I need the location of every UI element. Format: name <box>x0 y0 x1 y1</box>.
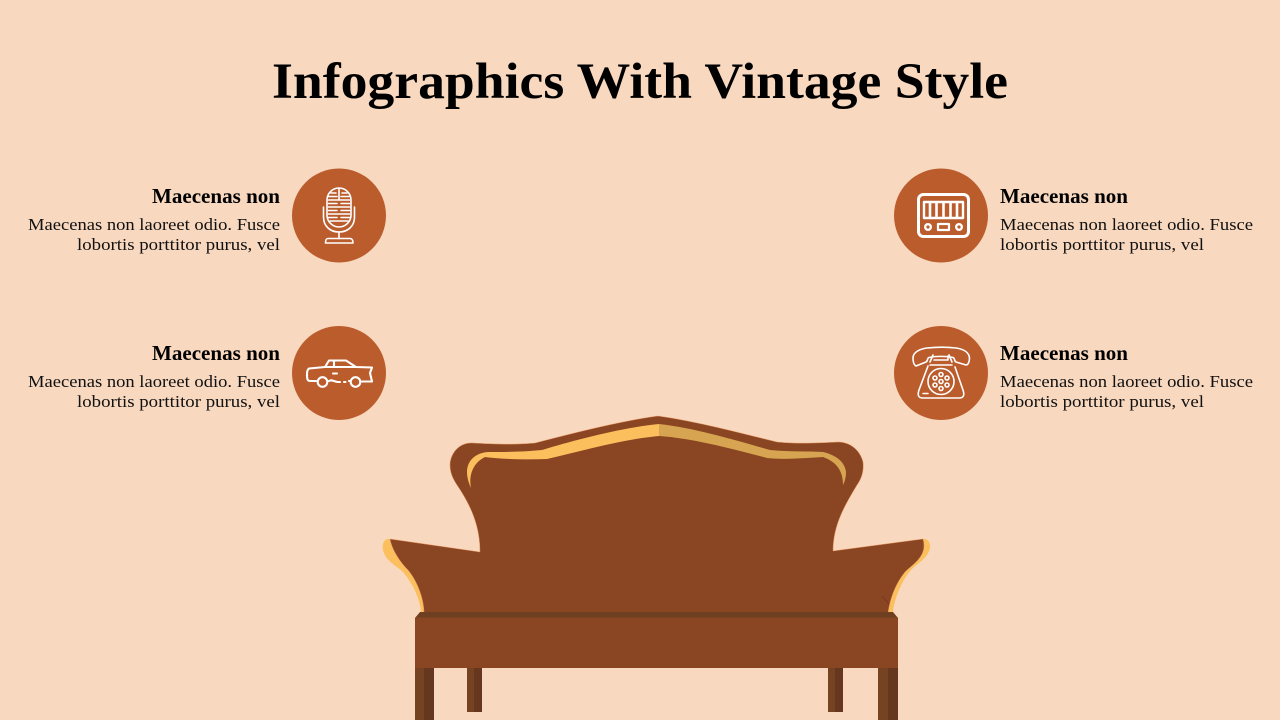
text block: top right: lobortis porttitor purus, vel <box>1000 235 1204 254</box>
text block: top left: Maecenas non <box>152 184 280 208</box>
icon: rotary telephone <box>894 326 988 420</box>
text block: top left: lobortis porttitor purus, vel <box>77 235 280 254</box>
yellow back trim left <box>467 424 659 488</box>
text block: bottom left: lobortis porttitor purus, vel <box>77 392 280 411</box>
arm seam mark <box>882 596 889 604</box>
illustration: vintage sofa <box>383 416 930 720</box>
icon: vintage radio <box>894 168 988 262</box>
left arm trim <box>383 539 425 612</box>
text block: bottom left <box>28 341 280 411</box>
right arm trim <box>887 539 930 612</box>
text block: bottom left: Maecenas non <box>152 341 280 365</box>
text block: bottom left: Maecenas non laoreet odio. Fusce <box>28 372 280 391</box>
text block: bottom right: Maecenas non laoreet odio. Fusce <box>1000 372 1253 391</box>
seat <box>415 618 898 668</box>
text block: bottom right: Maecenas non <box>1000 341 1128 365</box>
icon: vintage car <box>292 326 386 420</box>
text block: bottom right: lobortis porttitor purus, vel <box>1000 392 1204 411</box>
title: Infographics With Vintage Style <box>272 54 1008 110</box>
text block: top right: Maecenas non laoreet odio. Fusce <box>1000 215 1253 234</box>
text block: top left <box>28 184 280 254</box>
text block: top right: Maecenas non <box>1000 184 1128 208</box>
ochre back trim right <box>659 424 846 485</box>
sofa back and arms <box>390 416 924 613</box>
sofa legs <box>415 668 898 720</box>
text block: top right <box>1000 184 1253 254</box>
icon: microphone <box>292 168 386 262</box>
text block: bottom right <box>1000 341 1253 411</box>
seat strip <box>415 612 898 618</box>
text block: top left: Maecenas non laoreet odio. Fusce <box>28 215 280 234</box>
